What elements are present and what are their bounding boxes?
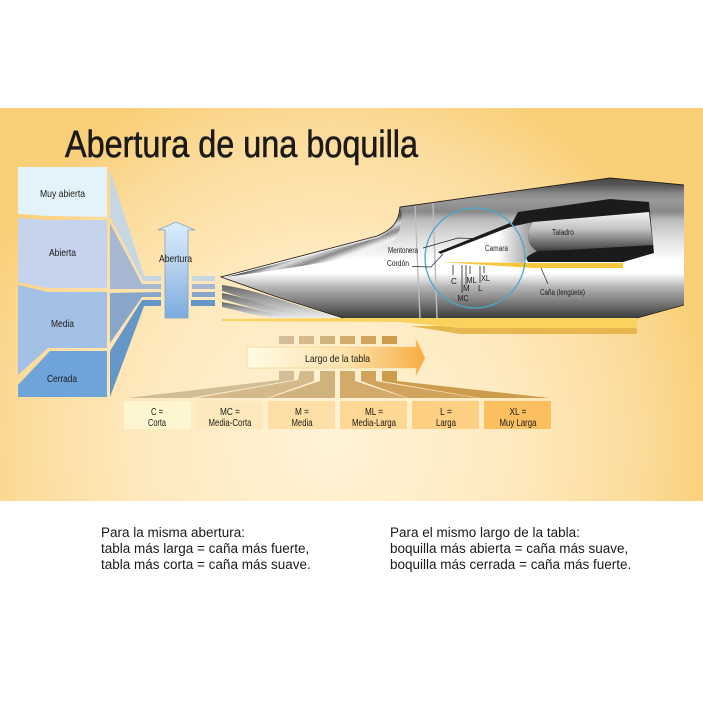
part labels: Caña (lengüeta) (540, 288, 585, 297)
facing length labels: M (463, 284, 470, 293)
arrow: Abertura (158, 222, 195, 318)
note: same opening (101, 525, 311, 572)
part labels: Mentonera (388, 246, 418, 255)
part labels: Taladro (552, 228, 574, 237)
box: C: C = (151, 406, 163, 418)
facing length labels: MC (458, 294, 469, 303)
box: MC: MC = (220, 406, 240, 418)
baffle strip (438, 223, 512, 255)
beak ridge (226, 208, 402, 277)
box: L: Larga (436, 417, 456, 429)
tapered connectors to mouthpiece tip (110, 170, 215, 397)
note: same facing length: boquilla más cerrada = caña más fuerte. (390, 557, 631, 572)
note: same facing length (390, 525, 631, 572)
reed (440, 262, 623, 268)
bore (528, 212, 653, 251)
facing length labels: XL (481, 274, 490, 283)
block: Cerrada: Cerrada (47, 373, 77, 385)
box: ML: ML = (365, 406, 383, 418)
length boxes (124, 401, 551, 429)
box: ML (340, 401, 407, 429)
box: C (124, 401, 191, 429)
arrow: Largo de la tabla: Largo de la tabla (305, 353, 370, 365)
box: ML: Media-Larga (352, 417, 396, 429)
block: Abierta: Abierta (49, 247, 76, 259)
note: same facing length: boquilla más abierta = caña más suave, (390, 541, 628, 556)
box: XL: XL = (510, 406, 526, 418)
tick marks (453, 265, 484, 293)
facing length labels: L (478, 284, 483, 293)
block: Muy abierta (18, 167, 107, 217)
note: same opening: tabla más larga = caña más fuerte, (101, 541, 309, 556)
title: Abertura de una boquilla (65, 124, 419, 166)
part labels: Cordón (387, 259, 409, 268)
block: Cerrada (18, 351, 107, 397)
reed layers under the tip (222, 285, 343, 318)
block: Media: Media (51, 318, 74, 330)
background panel (0, 108, 703, 501)
leader lines (412, 238, 548, 284)
facing length labels: C (451, 277, 457, 286)
box: M (268, 401, 335, 429)
block: Abierta (18, 218, 107, 288)
arrow: Abertura: Abertura (159, 253, 192, 265)
box: C: Corta (148, 417, 166, 429)
note: same facing length: Para el mismo largo de la tabla: (390, 525, 580, 540)
black bore walls (510, 199, 654, 262)
box: M: Media (292, 417, 313, 429)
top squares above facing arrow (279, 336, 397, 344)
facing length labels (451, 274, 490, 303)
fan connectors to length boxes (127, 371, 550, 398)
body outline (221, 178, 684, 318)
box: L (412, 401, 479, 429)
box: L: L = (440, 406, 452, 418)
ligature lines (415, 203, 437, 318)
opening size blocks (18, 167, 107, 397)
box: MC (196, 401, 263, 429)
block: Media (18, 285, 107, 375)
note: same opening: tabla más corta = caña más suave. (101, 557, 311, 572)
chamber (440, 222, 537, 263)
mouthpiece (221, 178, 684, 318)
circle (425, 208, 525, 308)
box: XL (484, 401, 551, 429)
facing length labels: ML (466, 276, 477, 285)
block: Muy abierta: Muy abierta (40, 188, 85, 200)
part labels (387, 228, 585, 297)
box: MC: Media-Corta (208, 417, 252, 429)
gold reed strip (222, 318, 637, 334)
part labels: Camara (485, 244, 508, 253)
note: same opening: Para la misma abertura: (101, 525, 245, 540)
mouthpiece body (221, 178, 684, 318)
box: M: M = (295, 406, 309, 418)
arrow: Largo de la tabla (247, 339, 425, 376)
box: XL: Muy Larga (500, 417, 537, 429)
